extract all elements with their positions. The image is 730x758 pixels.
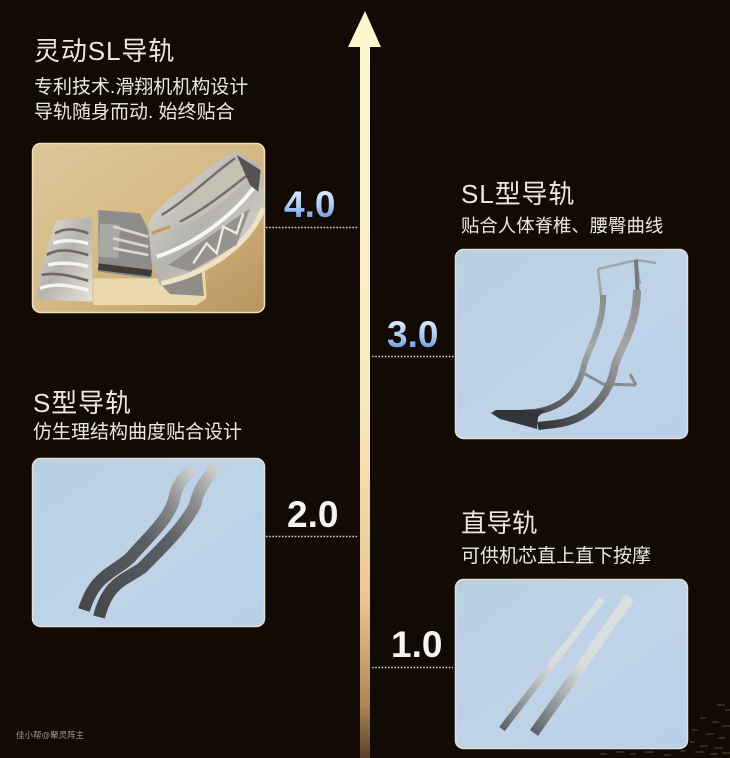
cross braces [585,374,636,385]
panel: straight rail image [456,580,688,748]
footrest [37,217,93,302]
number: 2.0: 2.0 [287,494,338,535]
panel: chair rail image [32,144,265,312]
number: 4.0: 4.0 [284,184,335,225]
panel: S型导轨 heading: S型导轨 [33,388,132,418]
dotted connector 3.0 [372,356,455,358]
panel: S型导轨 heading [33,388,242,443]
panel: 灵动SL导轨 heading: 灵动SL导轨 [34,36,175,66]
dotted connector 1.0 [372,666,453,668]
left rail [505,295,603,414]
dotted connector 2.0 [266,536,358,538]
panel: SL rail image [456,250,688,438]
panel: 直导轨 heading: 直导轨 [461,510,538,538]
gold speckle texture [600,705,730,755]
panel: SL型导轨 heading: 贴合人体脊椎、腰臀曲线 [461,215,663,236]
dotted connector 4.0 [266,226,358,228]
base plate [491,410,545,429]
left straight rail [502,599,602,729]
watermark: 佳小帮@聚灵阵主 [16,730,85,740]
floor plate [93,272,207,305]
pedestal [158,272,204,296]
growth arrow [348,11,381,758]
panel: SL型导轨 heading: SL型导轨 [461,179,575,209]
number: 3.0: 3.0 [387,314,438,355]
panel: S rail image [32,458,264,626]
panel: S型导轨 heading: 仿生理结构曲度贴合设计 [33,421,242,443]
panel: SL型导轨 heading [461,179,663,236]
right straight rail [534,597,630,733]
seat module [98,210,153,278]
number: 1.0: 1.0 [391,624,442,665]
panel: 灵动SL导轨 heading: 导轨随身而动. 始终贴合 [34,101,235,123]
right rail [99,467,216,617]
left rail [84,470,192,610]
top frame [598,260,656,296]
panel: 灵动SL导轨 heading: 专利技术.滑翔机机构设计 [34,76,248,98]
panel: 灵动SL导轨 heading [34,36,248,123]
panel: 直导轨 heading: 可供机芯直上直下按摩 [461,545,651,567]
right rail [538,290,637,426]
back frame [148,152,265,285]
panel: 直导轨 heading [461,510,651,567]
